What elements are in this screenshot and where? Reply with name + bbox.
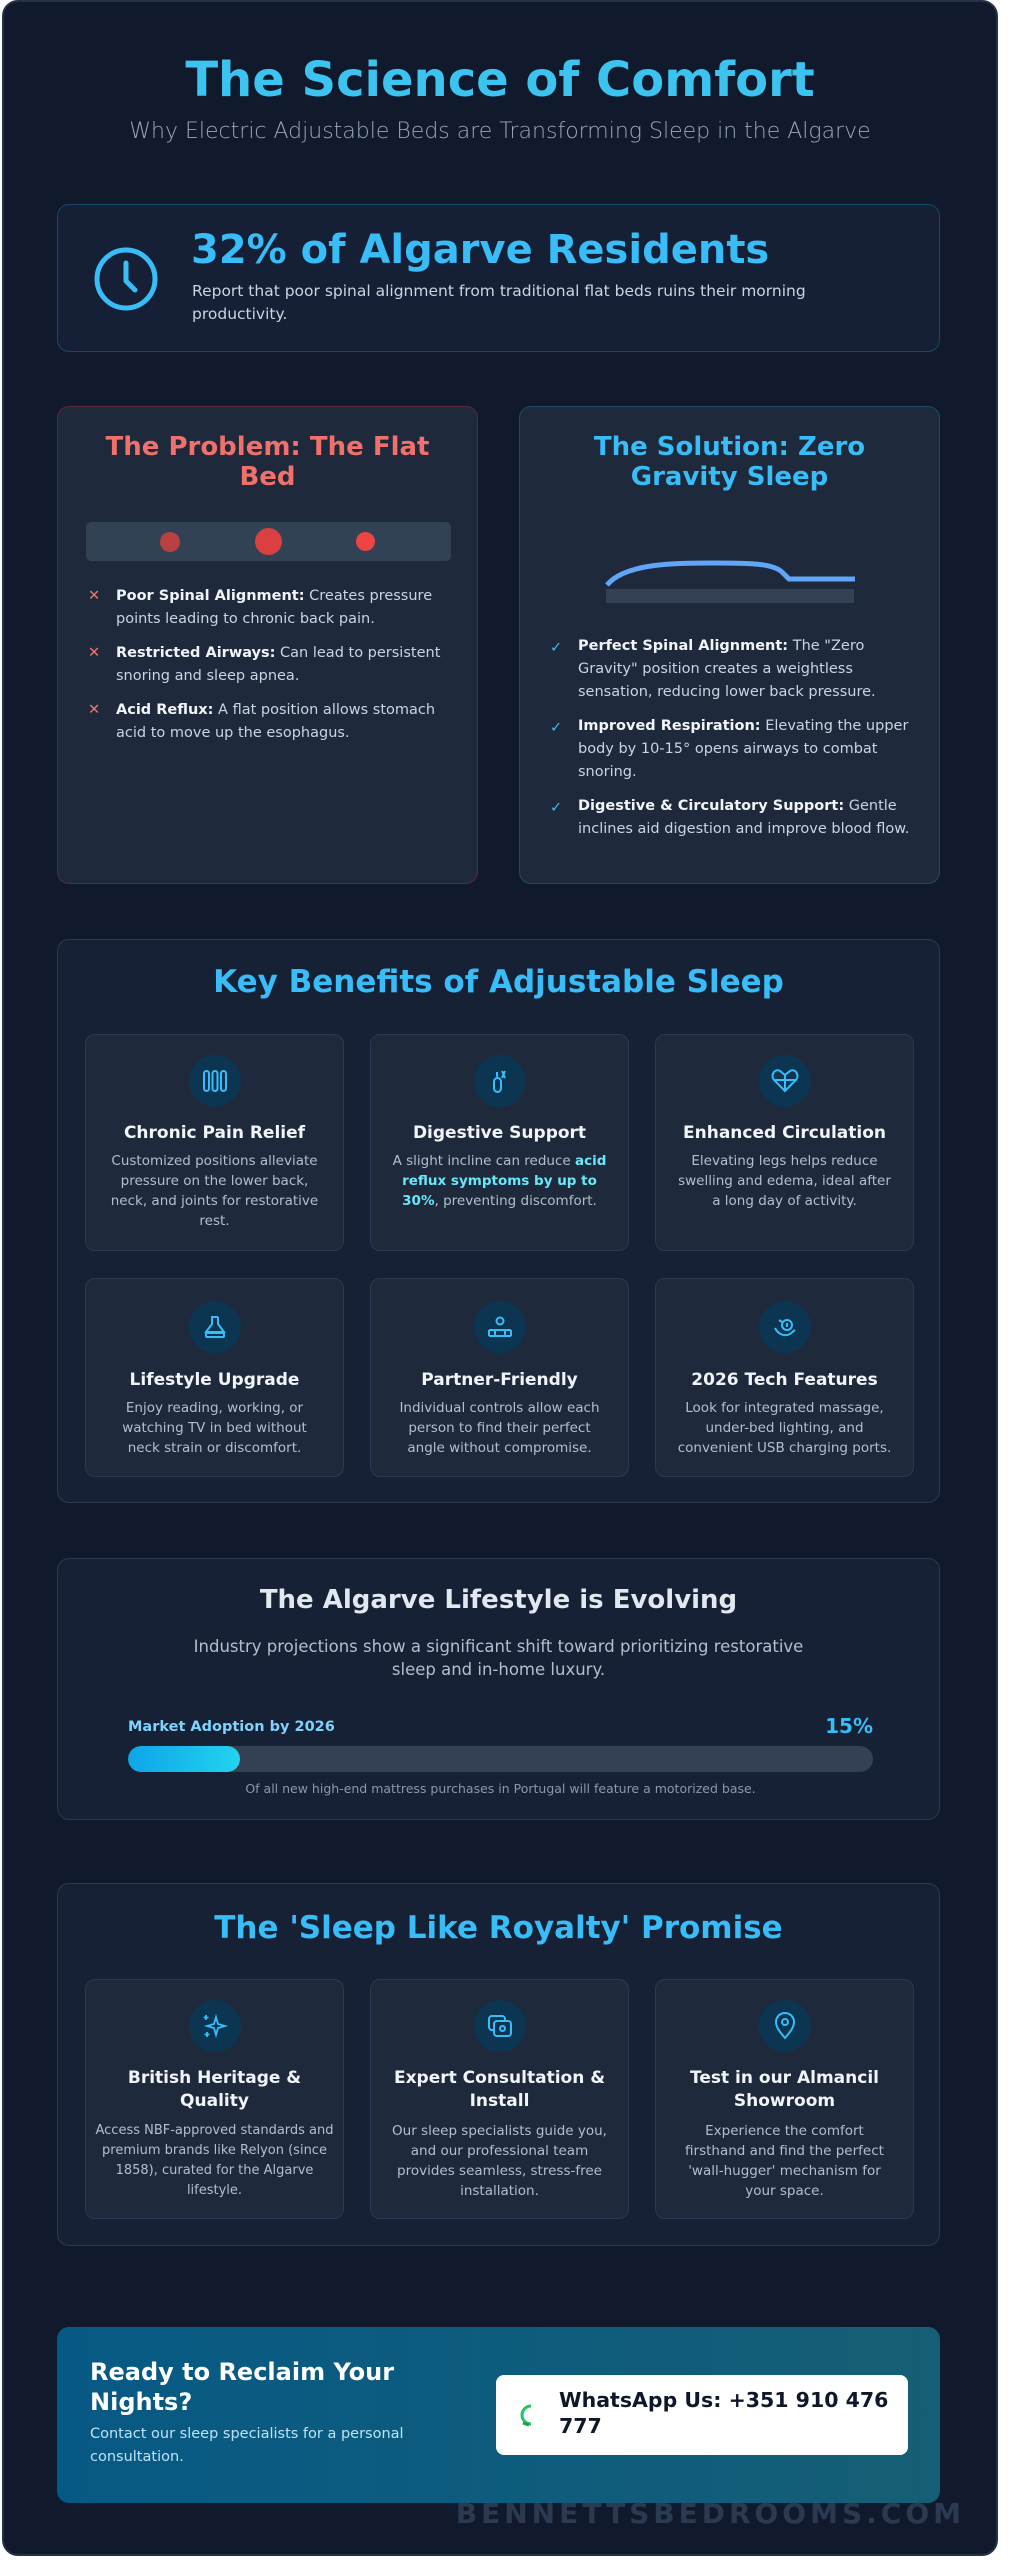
- solution list: Improved Respiration: Elevating the upper body by 10-15° opens airways to combat snoring.: [578, 718, 908, 780]
- icon: person on bed: [474, 1301, 526, 1353]
- card: british heritage: Access NBF-approved standards and premium brands like Relyon (since 1858), curated for the Algarve lifestyle.: [95, 2123, 334, 2198]
- card: partner-friendly: [370, 1278, 629, 1477]
- stat text: Report that poor spinal alignment from traditional flat beds ruins their morning productivity.: [192, 282, 806, 323]
- problem list: ✕: [88, 588, 100, 604]
- illustration: zero gravity bed: [605, 560, 855, 603]
- solution list: [550, 638, 909, 837]
- card: partner-friendly: Partner-Friendly: [421, 1370, 578, 1390]
- card: expert consultation: [370, 1979, 629, 2219]
- stat box: [57, 204, 940, 352]
- card: expert consultation: Expert Consultation & Install: [394, 2068, 605, 2111]
- panel: problem: [57, 406, 478, 884]
- card: 2026 tech features: Look for integrated massage, under-bed lighting, and convenient USB charging ports.: [678, 1400, 891, 1456]
- card: lifestyle upgrade: Lifestyle Upgrade: [130, 1370, 299, 1390]
- card: british heritage: [85, 1979, 344, 2219]
- icon: heart: [758, 1055, 810, 1107]
- card: showroom: [655, 1979, 914, 2219]
- card: lifestyle upgrade: Enjoy reading, working, or watching TV in bed without neck strain or discomfort.: [122, 1400, 307, 1456]
- icon: sparkle: [188, 2000, 240, 2052]
- card: digestive support: A slight incline can reduce acid reflux symptoms by up to 30%, preventing discomfort.: [393, 1153, 606, 1209]
- icon: whatsapp: [520, 2404, 531, 2426]
- card: enhanced circulation: [655, 1034, 914, 1251]
- illustration: flat bed pressure points: [86, 522, 451, 561]
- card: 2026 tech features: [655, 1278, 914, 1477]
- lifestyle text: Industry projections show a significant shift toward prioritizing restorative sleep and in-home luxury.: [194, 1637, 803, 1679]
- problem list: ✕: [88, 702, 100, 718]
- panel: algarve lifestyle: [57, 1558, 940, 1820]
- whatsapp button: WhatsApp Us: +351 910 476 777: [559, 2388, 888, 2438]
- card: partner-friendly: Individual controls allow each person to find their perfect angle without compromise.: [399, 1400, 600, 1456]
- card: lifestyle upgrade: [85, 1278, 344, 1477]
- problem list: ✕: [88, 645, 100, 661]
- problem heading: The Problem: The Flat Bed: [106, 432, 429, 492]
- icon: spine: [188, 1055, 240, 1107]
- card: chronic pain relief: Customized positions alleviate pressure on the lower back, neck, and joints for restorative rest.: [111, 1153, 318, 1229]
- card: showroom: Test in our Almancil Showroom: [690, 2068, 879, 2111]
- problem list: [88, 588, 440, 741]
- call to action banner: [57, 2327, 940, 2503]
- card: enhanced circulation: Elevating legs helps reduce swelling and edema, ideal after a long day of activity.: [678, 1153, 891, 1209]
- card: chronic pain relief: Chronic Pain Relief: [124, 1123, 305, 1143]
- progress chart: market adoption: Of all new high-end mattress purchases in Portugal will feature a motorized base.: [245, 1781, 756, 1796]
- solution list: Perfect Spinal Alignment: The "Zero Gravity" position creates a weightless sensation, reducing lower back pressure.: [578, 638, 876, 700]
- cta text: Contact our sleep specialists for a personal consultation.: [90, 2426, 404, 2465]
- icon: capsule: [474, 1055, 526, 1107]
- solution list: ✓: [550, 720, 562, 736]
- card: chronic pain relief: [85, 1034, 344, 1251]
- progress chart: market adoption: Market Adoption by 2026: [128, 1719, 335, 1735]
- progress chart: market adoption: 15%: [825, 1714, 873, 1738]
- card: expert consultation: Our sleep specialists guide you, and our professional team provides seamless, stress-free installation.: [392, 2123, 607, 2199]
- icon: hand with device: [758, 1301, 810, 1353]
- card: digestive support: [370, 1034, 629, 1251]
- solution heading: The Solution: Zero Gravity Sleep: [594, 432, 865, 492]
- card: showroom: Experience the comfort firsthand and find the perfect 'wall-hugger' mechanism for your space.: [685, 2123, 884, 2199]
- panel: key benefits: [57, 939, 940, 1503]
- card: british heritage: British Heritage & Quality: [128, 2068, 301, 2111]
- lifestyle heading: The Algarve Lifestyle is Evolving: [260, 1585, 737, 1615]
- solution list: Digestive & Circulatory Support: Gentle inclines aid digestion and improve blood flow.: [578, 798, 909, 837]
- title: The Science of Comfort: [185, 52, 815, 108]
- footer brand: BENNETTSBEDROOMS.COM: [456, 2497, 965, 2530]
- card: enhanced circulation: Enhanced Circulation: [683, 1123, 886, 1143]
- solution list: ✓: [550, 800, 562, 816]
- cta heading: Ready to Reclaim Your Nights?: [90, 2358, 394, 2416]
- problem list: Poor Spinal Alignment: Creates pressure points leading to chronic back pain.: [116, 588, 432, 627]
- subtitle: Why Electric Adjustable Beds are Transforming Sleep in the Algarve: [129, 119, 871, 144]
- solution list: ✓: [550, 640, 562, 656]
- promise heading: The 'Sleep Like Royalty' Promise: [214, 1910, 783, 1946]
- icon: map pin: [758, 2000, 810, 2052]
- problem list: Restricted Airways: Can lead to persistent snoring and sleep apnea.: [116, 645, 440, 684]
- stat heading: 32% of Algarve Residents: [191, 227, 769, 273]
- card: 2026 tech features: 2026 Tech Features: [691, 1370, 878, 1390]
- problem list: Acid Reflux: A flat position allows stomach acid to move up the esophagus.: [116, 702, 435, 741]
- icon: clock: [94, 248, 158, 310]
- panel: sleep like royalty promise: [57, 1883, 940, 2246]
- panel: solution: [519, 406, 940, 884]
- progress chart: market adoption: [128, 1714, 873, 1796]
- whatsapp button: [496, 2375, 908, 2455]
- benefits heading: Key Benefits of Adjustable Sleep: [213, 964, 784, 1000]
- icon: lamp: [188, 1301, 240, 1353]
- icon: camera/screens: [474, 2000, 526, 2052]
- card: digestive support: Digestive Support: [413, 1123, 586, 1143]
